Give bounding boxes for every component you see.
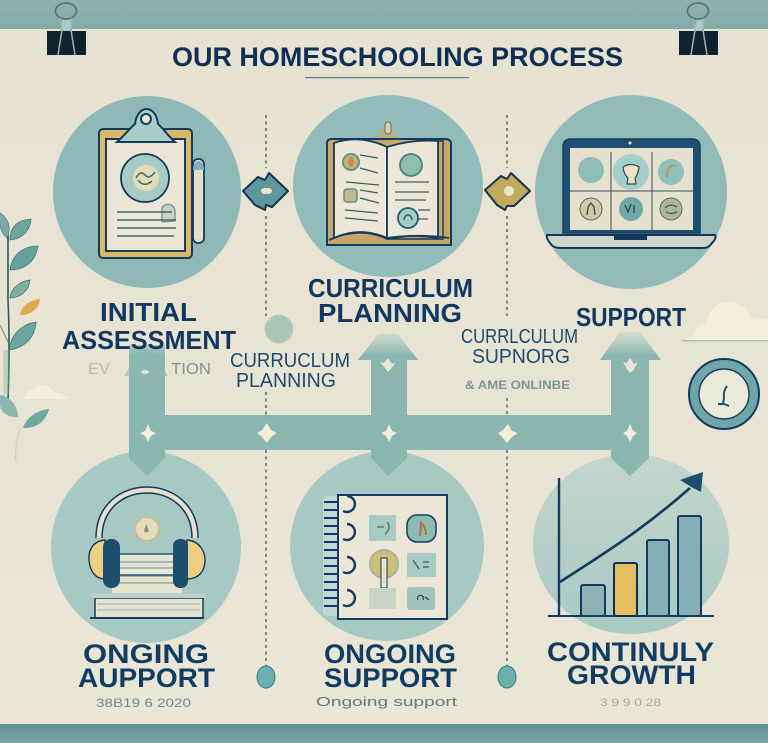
label: curriculum planning main xyxy=(308,273,473,328)
caption: evaluation: TION xyxy=(171,361,211,378)
caption: ongoing support: Ongoing support xyxy=(316,694,458,709)
circle: curriculum planning xyxy=(293,95,483,277)
icon: cloud right xyxy=(682,302,768,342)
label: ongoing support: SUPPORT xyxy=(324,663,458,693)
circle: continual growth xyxy=(533,454,729,634)
arrow badge: teal xyxy=(243,173,288,210)
circle: ongoing support notebook xyxy=(290,451,484,641)
trend arrow xyxy=(560,472,703,582)
growth chart xyxy=(548,472,714,617)
label: curriculum planning main: CURRICULUM xyxy=(308,273,473,303)
label: curriculum planning secondary: PLANNING xyxy=(236,370,336,392)
left binder clip xyxy=(47,3,86,55)
label: continuly growth: CONTINULY xyxy=(547,637,714,667)
label: curriculum support secondary: CURRLCULUM xyxy=(461,326,578,348)
small token xyxy=(265,315,293,343)
icon: spiral notebook xyxy=(323,495,447,619)
label: ongoing support xyxy=(324,639,458,693)
label: initial assessment: ASSESSMENT xyxy=(62,325,236,355)
dashed divider right xyxy=(506,115,508,668)
right binder clip xyxy=(679,3,718,55)
label: initial assessment: INITIAL xyxy=(100,297,197,327)
caption: date left: 38B19 6 2020 xyxy=(96,696,191,710)
icon: open book xyxy=(327,122,451,245)
dashed divider left xyxy=(265,115,267,668)
circle: online support xyxy=(535,95,727,289)
title underline xyxy=(305,77,469,78)
icon: headphones and books xyxy=(89,490,206,618)
label: ongoing aupport: ONGING xyxy=(83,639,209,669)
label: curriculum support secondary xyxy=(461,326,578,368)
label: curriculum support secondary: SUPNORG xyxy=(472,346,570,368)
circle: ongoing support headphones xyxy=(51,451,241,643)
icon: pencil xyxy=(193,159,204,243)
label: ongoing aupport: AUPPORT xyxy=(78,663,216,693)
icon: clipboard xyxy=(99,109,192,258)
caption: evaluation xyxy=(88,361,211,378)
bottom teal band xyxy=(0,724,768,743)
caption: online: & AME ONLINBE xyxy=(465,378,570,392)
label: continuly growth: GROWTH xyxy=(567,660,696,690)
clock badge xyxy=(689,359,759,429)
circle: initial assessment xyxy=(53,96,241,288)
label: curriculum planning secondary xyxy=(230,350,350,392)
top teal band xyxy=(0,0,768,29)
label: ongoing aupport xyxy=(78,639,216,693)
timeline dot right xyxy=(498,666,516,688)
label: curriculum planning secondary: CURRUCLUM xyxy=(230,350,350,372)
label: continuly growth xyxy=(547,637,714,690)
arrow badge: gold xyxy=(485,173,530,210)
timeline dot left xyxy=(257,666,275,688)
process arrows network xyxy=(124,332,661,476)
plant decoration xyxy=(0,213,49,462)
label: support: SUPPORT xyxy=(576,302,686,332)
title: OUR HOMESCHOOLING PROCESS xyxy=(172,42,623,72)
label: curriculum planning main: PLANNING xyxy=(318,298,462,328)
caption: date right: 3 9 9 0 28 xyxy=(600,697,661,709)
label: ongoing support: ONGOING xyxy=(324,639,456,669)
caption: evaluation: EV xyxy=(88,361,110,378)
icon: cloud left xyxy=(23,385,68,399)
label: initial assessment xyxy=(62,297,236,355)
icon: laptop xyxy=(547,139,716,248)
diamond markers xyxy=(140,358,638,443)
